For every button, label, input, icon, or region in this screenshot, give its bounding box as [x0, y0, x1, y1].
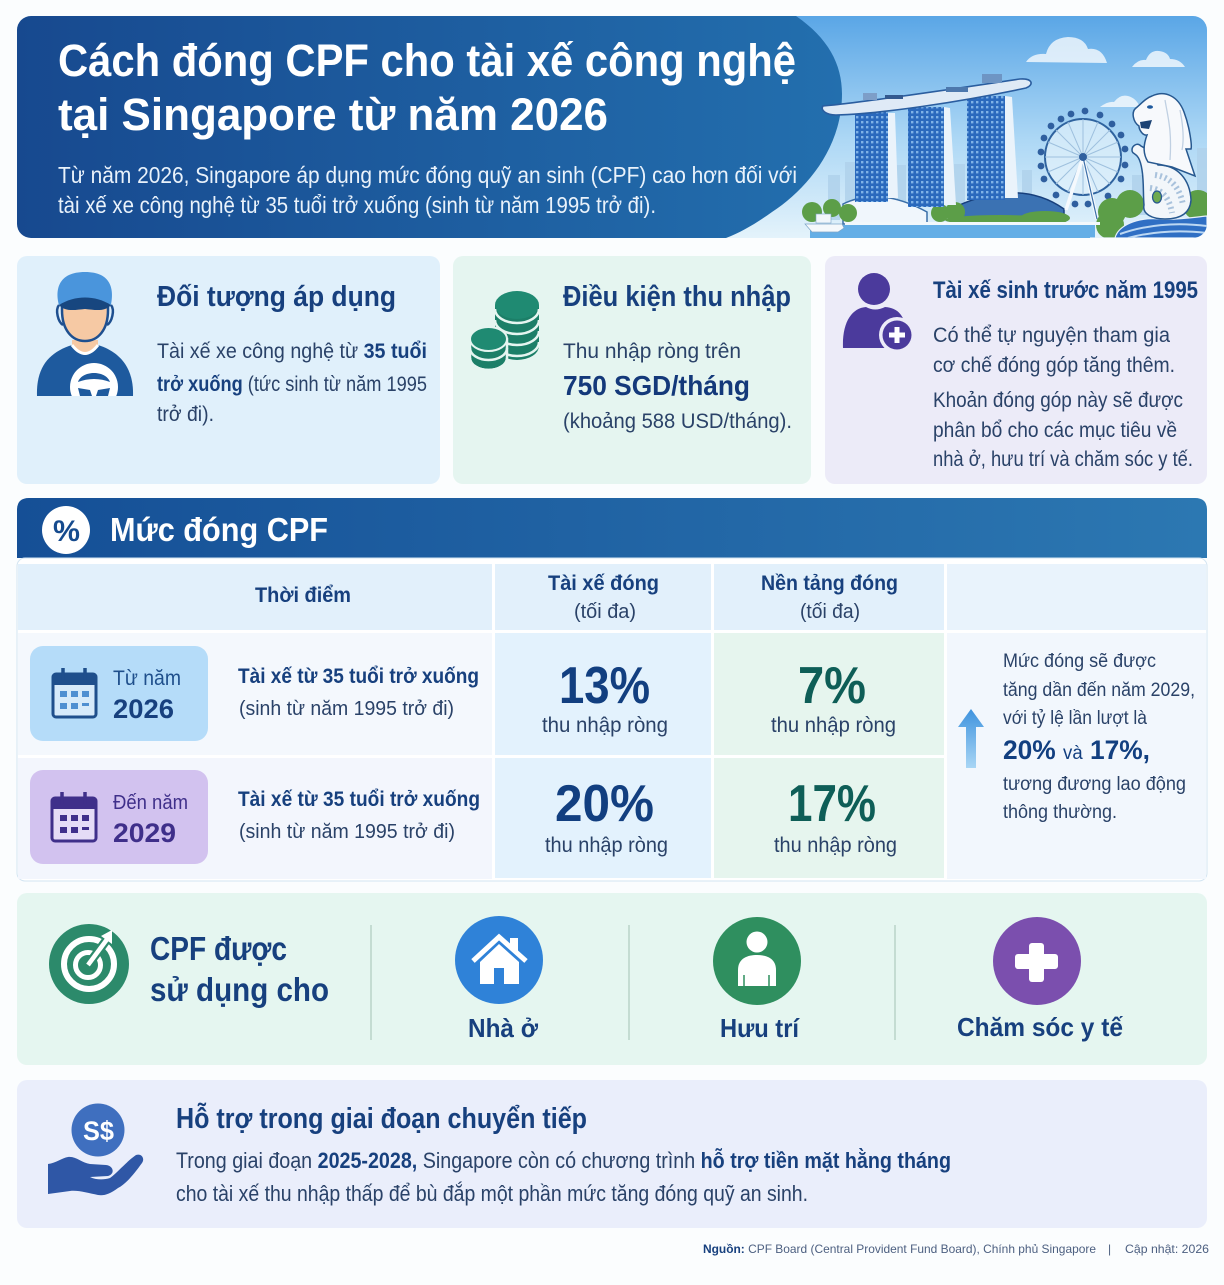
heading: target group: Đối tượng áp dụng [157, 281, 396, 313]
icon: driver [37, 272, 133, 411]
text: transition support body: Trong giai đoạn 2025-2028, Singapore còn có chương trình hỗ trợ tiền mặt hằng tháng [176, 1148, 951, 1173]
text: income condition body: (khoảng 588 USD/tháng). [563, 410, 792, 433]
heading: CPF used for [150, 930, 329, 1008]
text: voluntary contribution body: nhà ở, hưu trí và chăm sóc y tế. [933, 448, 1193, 471]
value: platform 17%: 17% [788, 775, 876, 833]
text: rate increase note: tăng dần đến năm 2029, [1003, 680, 1195, 701]
contribution table [17, 558, 1207, 881]
table header row: (tối đa) [800, 601, 860, 623]
value: driver 13% [542, 657, 668, 737]
use: housing [455, 916, 543, 1043]
table header row: Thời điểm [255, 584, 351, 607]
heading: CPF used for: CPF được [150, 930, 287, 967]
hero banner [17, 16, 1213, 239]
value: driver 20%: thu nhập ròng [545, 834, 668, 857]
arrow: rising rate [958, 709, 984, 768]
text: rate increase note: thông thường. [1003, 802, 1117, 823]
panel: income condition [453, 256, 811, 484]
use: housing: Nhà ở [468, 1013, 538, 1043]
text: voluntary contribution body: phân bổ cho các mục tiêu về [933, 419, 1177, 442]
hero dark blue panel [17, 16, 842, 238]
text: rate increase note: với tỷ lệ lần lượt là [1003, 708, 1147, 729]
panel: drivers born before 1995 [825, 256, 1207, 484]
value: platform 17% [774, 775, 897, 857]
footer: source and update: Nguồn: CPF Board (Central Provident Fund Board), Chính phủ Singapore [703, 1242, 1096, 1256]
text: voluntary contribution body [933, 324, 1193, 471]
section header: CPF contribution rate [17, 498, 1207, 558]
hero subtitle: Từ năm 2026, Singapore áp dụng mức đóng quỹ an sinh (CPF) cao hơn đối với [58, 162, 797, 188]
hero title: tại Singapore từ năm 2026 [58, 89, 608, 140]
badge: from 2026: Từ năm [113, 667, 181, 690]
Merlion statue [1132, 94, 1195, 219]
icon: person with plus [843, 273, 915, 353]
Marina Bay Sands [822, 74, 1031, 207]
footer: source and update: Cập nhật: 2026 [1125, 1242, 1209, 1256]
text: target group body [157, 340, 427, 426]
badge: from 2026 [30, 646, 208, 741]
text: rate increase note: 20% và 17%, [1003, 735, 1150, 765]
text: voluntary contribution body: Khoản đóng góp này sẽ được [933, 389, 1183, 412]
section header: CPF contribution rate: % [53, 515, 80, 548]
text: income condition body: 750 SGD/tháng [563, 370, 750, 401]
value: driver 13%: 13% [559, 657, 650, 715]
value: driver 20%: 20% [555, 775, 654, 833]
icon: hand with S$ coin [48, 1104, 143, 1195]
text: voluntary contribution body: cơ chế đóng góp tăng thêm. [933, 354, 1175, 377]
panel: target group [17, 256, 440, 484]
text: transition support body: cho tài xế thu nhập thấp để bù đắp một phần mức tăng đóng quỹ an sinh. [176, 1181, 808, 1206]
hero subtitle [58, 162, 797, 218]
use: healthcare [957, 917, 1123, 1042]
text: row 2026 description: (sinh từ năm 1995 trở đi) [239, 698, 454, 720]
water waves [1090, 216, 1207, 238]
icon: target [49, 924, 129, 1004]
text: row 2029 description: Tài xế từ 35 tuổi trở xuống [238, 788, 480, 811]
text: row 2026 description [238, 665, 479, 720]
value: platform 7%: thu nhập ròng [771, 714, 896, 737]
text: row 2026 description: Tài xế từ 35 tuổi trở xuống [238, 665, 479, 688]
text: rate increase note: tương đương lao động [1003, 774, 1186, 795]
text: rate increase note [1003, 651, 1195, 823]
text: row 2029 description [238, 788, 480, 843]
text: row 2029 description: (sinh từ năm 1995 trở đi) [239, 821, 455, 843]
value: platform 17%: thu nhập ròng [774, 834, 897, 857]
badge: to 2029: Đến năm [113, 792, 188, 814]
heading: income condition: Điều kiện thu nhập [563, 281, 791, 313]
use: retirement: Hưu trí [720, 1013, 800, 1043]
table header row: Nền tảng đóng [761, 572, 898, 595]
Singapore Flyer [1038, 108, 1128, 219]
text: income condition body [563, 340, 792, 433]
badge: from 2026: 2026 [113, 694, 174, 724]
use: healthcare: Chăm sóc y tế [957, 1012, 1123, 1042]
icon: hand with S$ coin: S$ [83, 1116, 114, 1146]
text: target group body: trở xuống (tức sinh từ năm 1995 [157, 373, 427, 396]
badge: to 2029: 2029 [113, 818, 176, 848]
hero subtitle: tài xế xe công nghệ từ 35 tuổi trở xuống (sinh từ năm 1995 trở đi). [58, 192, 656, 218]
hero title: Cách đóng CPF cho tài xế công nghệ [58, 35, 796, 86]
text: target group body: Tài xế xe công nghệ từ 35 tuổi [157, 340, 427, 363]
table header row [18, 564, 1206, 630]
illustration: Singapore skyline [700, 16, 1213, 239]
text: target group body: trở đi). [157, 403, 214, 426]
use: retirement [713, 917, 801, 1043]
trees and shore [802, 190, 1213, 239]
heading: transition support: Hỗ trợ trong giai đoạn chuyển tiếp [176, 1101, 587, 1135]
panel: transition support [17, 1080, 1207, 1228]
value: driver 20% [545, 775, 668, 857]
Marina arcs [843, 197, 927, 224]
text: rate increase note: Mức đóng sẽ được [1003, 651, 1156, 672]
value: driver 13%: thu nhập ròng [542, 714, 668, 737]
footer: source and update: | [1108, 1242, 1111, 1256]
value: platform 7%: 7% [798, 657, 866, 715]
badge: to 2029 [30, 770, 208, 864]
row background cells [18, 633, 1206, 879]
table header row: (tối đa) [574, 601, 636, 623]
text: transition support body [176, 1148, 951, 1206]
value: platform 7% [771, 657, 896, 737]
heading: CPF used for: sử dụng cho [150, 971, 329, 1008]
hero title [58, 35, 796, 140]
panel: CPF uses [17, 893, 1207, 1065]
text: income condition body: Thu nhập ròng trên [563, 340, 741, 363]
text: voluntary contribution body: Có thể tự nguyện tham gia [933, 324, 1170, 347]
icon: coins [470, 291, 539, 370]
table header row: Tài xế đóng [548, 572, 659, 595]
section header: CPF contribution rate: Mức đóng CPF [110, 511, 328, 548]
